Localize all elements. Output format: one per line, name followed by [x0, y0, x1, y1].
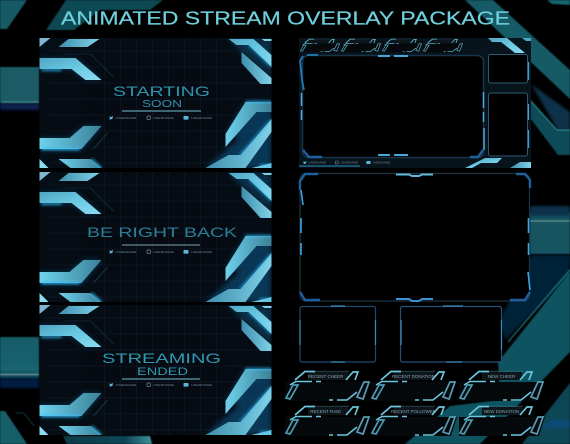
widget: recent cheer: RECENT CHEER — [308, 374, 344, 379]
heading: streaming ended: ENDED — [137, 366, 188, 378]
title: ANIMATED STREAM OVERLAY PACKAGE — [61, 8, 510, 28]
panel: starting soon screen — [40, 38, 272, 168]
top connector — [396, 174, 433, 176]
widget: new donation: NEW DONATION — [484, 409, 519, 414]
heading: starting soon: SOON — [142, 99, 182, 110]
side camera frame top — [488, 54, 528, 83]
widget: new cheer: NEW CHEER — [488, 374, 516, 379]
side camera frame bottom — [488, 93, 528, 156]
main camera frame — [300, 55, 484, 158]
panel: streaming ended screen — [40, 305, 272, 435]
side frame highlights — [528, 62, 530, 148]
heading: streaming ended — [102, 350, 221, 378]
heading: be right back: BE RIGHT BACK — [87, 224, 238, 240]
widget: new cheer — [459, 371, 545, 401]
panel: large camera frame — [300, 174, 530, 301]
mock alert strip — [300, 39, 463, 52]
widget: recent follower: RECENT FOLLOWER — [391, 409, 437, 414]
widget: recent cheer — [285, 371, 371, 401]
panel: small frame left — [300, 306, 376, 362]
panel: small frame right — [400, 306, 502, 362]
panel: be right back screen — [40, 172, 272, 302]
social handles — [303, 161, 391, 165]
social handles — [109, 250, 212, 254]
heading: starting soon — [113, 83, 210, 110]
panel: in-game overlay mockup — [299, 38, 531, 168]
widget: recent donation: RECENT DONATION — [392, 374, 435, 379]
heading: streaming ended: STREAMING — [102, 350, 221, 366]
widget: recent donation — [371, 371, 457, 401]
bottom connector — [396, 299, 433, 301]
widget: recent raid: RECENT RAID — [310, 409, 341, 414]
bottom bar accents — [299, 158, 531, 168]
widget: recent follower — [371, 406, 457, 436]
top right accent — [488, 38, 525, 53]
widget: recent raid — [285, 406, 371, 436]
alert widgets — [285, 371, 545, 436]
social handles — [109, 116, 212, 120]
heading: starting soon: STARTING — [113, 83, 210, 99]
social handles — [109, 383, 212, 387]
widget: new donation — [459, 406, 545, 436]
